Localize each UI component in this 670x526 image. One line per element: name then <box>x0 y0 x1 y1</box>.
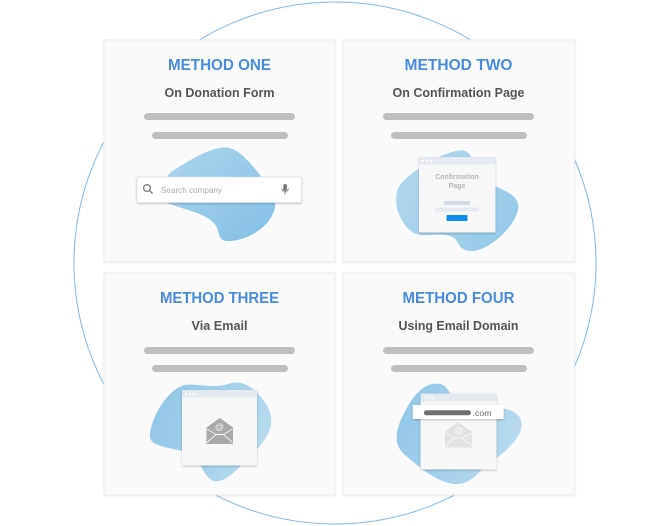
confirmation page window <box>419 157 496 232</box>
subtitle: using email domain: Using Email Domain <box>398 319 518 333</box>
blob: method two <box>396 150 518 251</box>
placeholder text lines <box>383 347 534 372</box>
domain bar: .com <box>472 409 492 418</box>
blob: method four <box>397 384 522 484</box>
window title bar <box>420 394 496 402</box>
heading: method three: METHOD THREE <box>160 290 279 307</box>
form fields <box>435 201 479 212</box>
email window with domain bar <box>413 394 504 470</box>
icon: microphone <box>281 184 289 194</box>
heading: method two: METHOD TWO <box>404 57 512 74</box>
confirmation page window: Page <box>449 183 465 190</box>
window title bar <box>182 390 257 398</box>
subtitle: on confirmation page: On Confirmation Page <box>392 86 525 100</box>
heading: method four: METHOD FOUR <box>402 290 515 307</box>
subtitle: on donation form: On Donation Form <box>164 86 274 100</box>
subtitle: via email: Via Email <box>192 319 248 333</box>
placeholder text lines <box>144 347 295 372</box>
window title bar <box>419 157 496 164</box>
icon: search <box>144 185 152 194</box>
search placeholder: Search company <box>161 185 223 195</box>
panel: method four <box>343 273 574 495</box>
email window <box>182 390 257 466</box>
icon: open envelope: @ <box>454 426 463 436</box>
panel: method two <box>343 40 574 262</box>
panel: method three <box>104 273 335 495</box>
icon: open envelope: @ <box>215 422 224 432</box>
heading: method one: METHOD ONE <box>168 57 271 74</box>
placeholder text lines <box>144 113 295 139</box>
blob: method three <box>150 382 271 481</box>
panel: method one <box>104 40 335 262</box>
search bar <box>137 177 302 202</box>
blob: method one <box>162 147 275 241</box>
background circle <box>74 2 596 524</box>
confirmation page text: Confirmation <box>435 174 479 181</box>
submit button <box>446 215 468 221</box>
placeholder text lines <box>383 113 534 139</box>
